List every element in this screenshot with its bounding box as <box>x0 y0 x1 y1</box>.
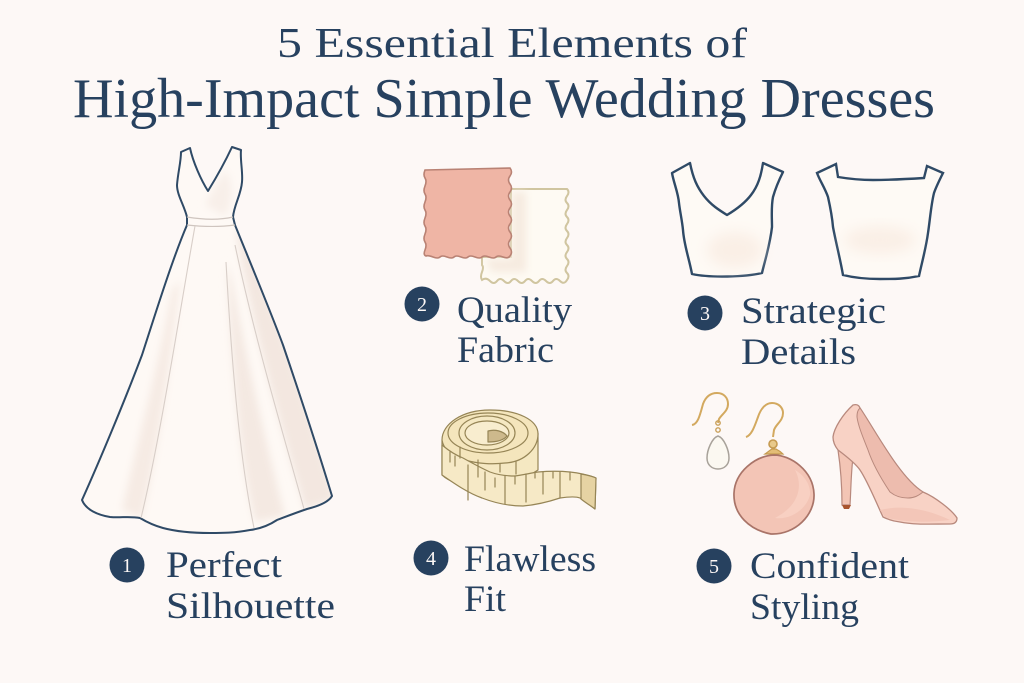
pink swatch <box>424 168 512 258</box>
number badge 3: 3 <box>700 303 710 325</box>
icon: round pendant earring <box>734 403 814 534</box>
label: Flawless Fit: Fit <box>464 579 507 620</box>
label: Confident Styling: Confident <box>750 546 910 587</box>
roll side <box>442 433 538 487</box>
number badge 5: 5 <box>709 556 719 578</box>
panel: confident styling <box>692 393 957 628</box>
number badge 3 <box>688 296 722 330</box>
title: High-Impact Simple Wedding Dresses <box>73 68 935 130</box>
panel: perfect silhouette <box>82 147 335 627</box>
icon: fabric swatches <box>424 168 568 283</box>
label: Strategic Details: Strategic <box>741 291 886 332</box>
roll top <box>442 410 538 464</box>
number badge 5 <box>696 548 732 584</box>
number badge 2 <box>404 286 440 322</box>
number badge 1: 1 <box>122 555 132 577</box>
label: Strategic Details <box>741 291 886 373</box>
icon: measuring tape <box>442 410 596 509</box>
title: 5 Essential Elements of <box>277 21 747 67</box>
number badge 4 <box>414 540 448 576</box>
panel: strategic details <box>672 163 943 373</box>
icon: pearl earring <box>692 393 729 469</box>
label: Flawless Fit <box>464 539 596 620</box>
label: Quality Fabric: Fabric <box>457 330 554 371</box>
icon: high heel shoe <box>833 405 957 524</box>
label: Strategic Details: Details <box>741 332 856 373</box>
cream swatch <box>481 189 568 283</box>
infographic canvas <box>74 27 958 627</box>
panel: flawless fit <box>414 410 596 620</box>
label: Quality Fabric: Quality <box>457 290 573 331</box>
label: Perfect Silhouette: Perfect <box>166 545 283 586</box>
number badge 2: 2 <box>417 294 427 316</box>
icon: v-neck bodice <box>672 163 783 277</box>
label: Perfect Silhouette: Silhouette <box>166 586 335 627</box>
label: Flawless Fit: Flawless <box>464 539 596 580</box>
number badge 1 <box>110 548 144 582</box>
icon: square-neck bodice <box>817 164 943 279</box>
icon: wedding dress <box>82 147 335 533</box>
title <box>73 21 935 130</box>
label: Quality Fabric <box>457 290 573 371</box>
number badge 4: 4 <box>426 548 436 570</box>
free tape strip <box>442 445 596 509</box>
panel: quality fabric <box>404 168 573 371</box>
label: Confident Styling: Styling <box>750 587 859 628</box>
label: Perfect Silhouette <box>166 545 335 627</box>
label: Confident Styling <box>750 546 910 628</box>
